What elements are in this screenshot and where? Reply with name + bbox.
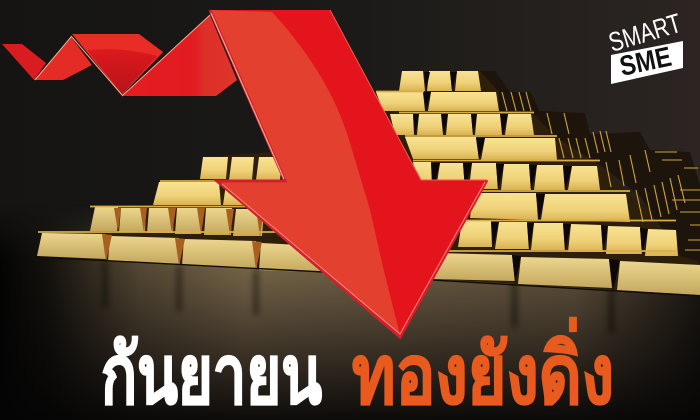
ribbon fold 4 xyxy=(122,15,237,96)
ribbon fold 1 xyxy=(2,44,46,80)
tier 5 bars xyxy=(413,162,600,190)
ribbon fold 3 xyxy=(72,34,163,95)
logo: Smart SME xyxy=(605,8,685,84)
dark wedges between right bars xyxy=(413,72,648,291)
tier 4 bars xyxy=(405,137,557,160)
logo white badge xyxy=(611,41,683,84)
tier 3 bars xyxy=(390,114,534,135)
red arrow xyxy=(2,10,487,337)
headline orange part: ทองยังดิ่ง xyxy=(352,317,614,420)
arrow edge highlights xyxy=(210,10,487,337)
headline white part: กันยายน xyxy=(101,330,322,420)
orange wedges between left bars xyxy=(102,208,264,270)
left bottom tier xyxy=(37,233,335,273)
tier 6 bars xyxy=(470,193,630,222)
tier 1 bars xyxy=(399,71,481,91)
gold bar stack xyxy=(37,71,700,296)
stack underlay xyxy=(37,71,700,295)
headline xyxy=(101,317,614,420)
shadowed bar ends on the right xyxy=(480,71,700,262)
left upper tiers xyxy=(153,157,282,205)
left tier 2 bars xyxy=(90,207,264,236)
reflective floor xyxy=(0,200,700,420)
tier 2 bars xyxy=(376,92,499,111)
logo badge text: SME xyxy=(617,41,674,82)
bottom tier right xyxy=(433,253,700,295)
ribbon highlights xyxy=(35,15,210,96)
ribbon fold 2 xyxy=(34,37,92,80)
arrow body and head xyxy=(210,10,487,337)
tier 7 bars right xyxy=(458,221,678,256)
arrow lit panel xyxy=(210,10,400,335)
